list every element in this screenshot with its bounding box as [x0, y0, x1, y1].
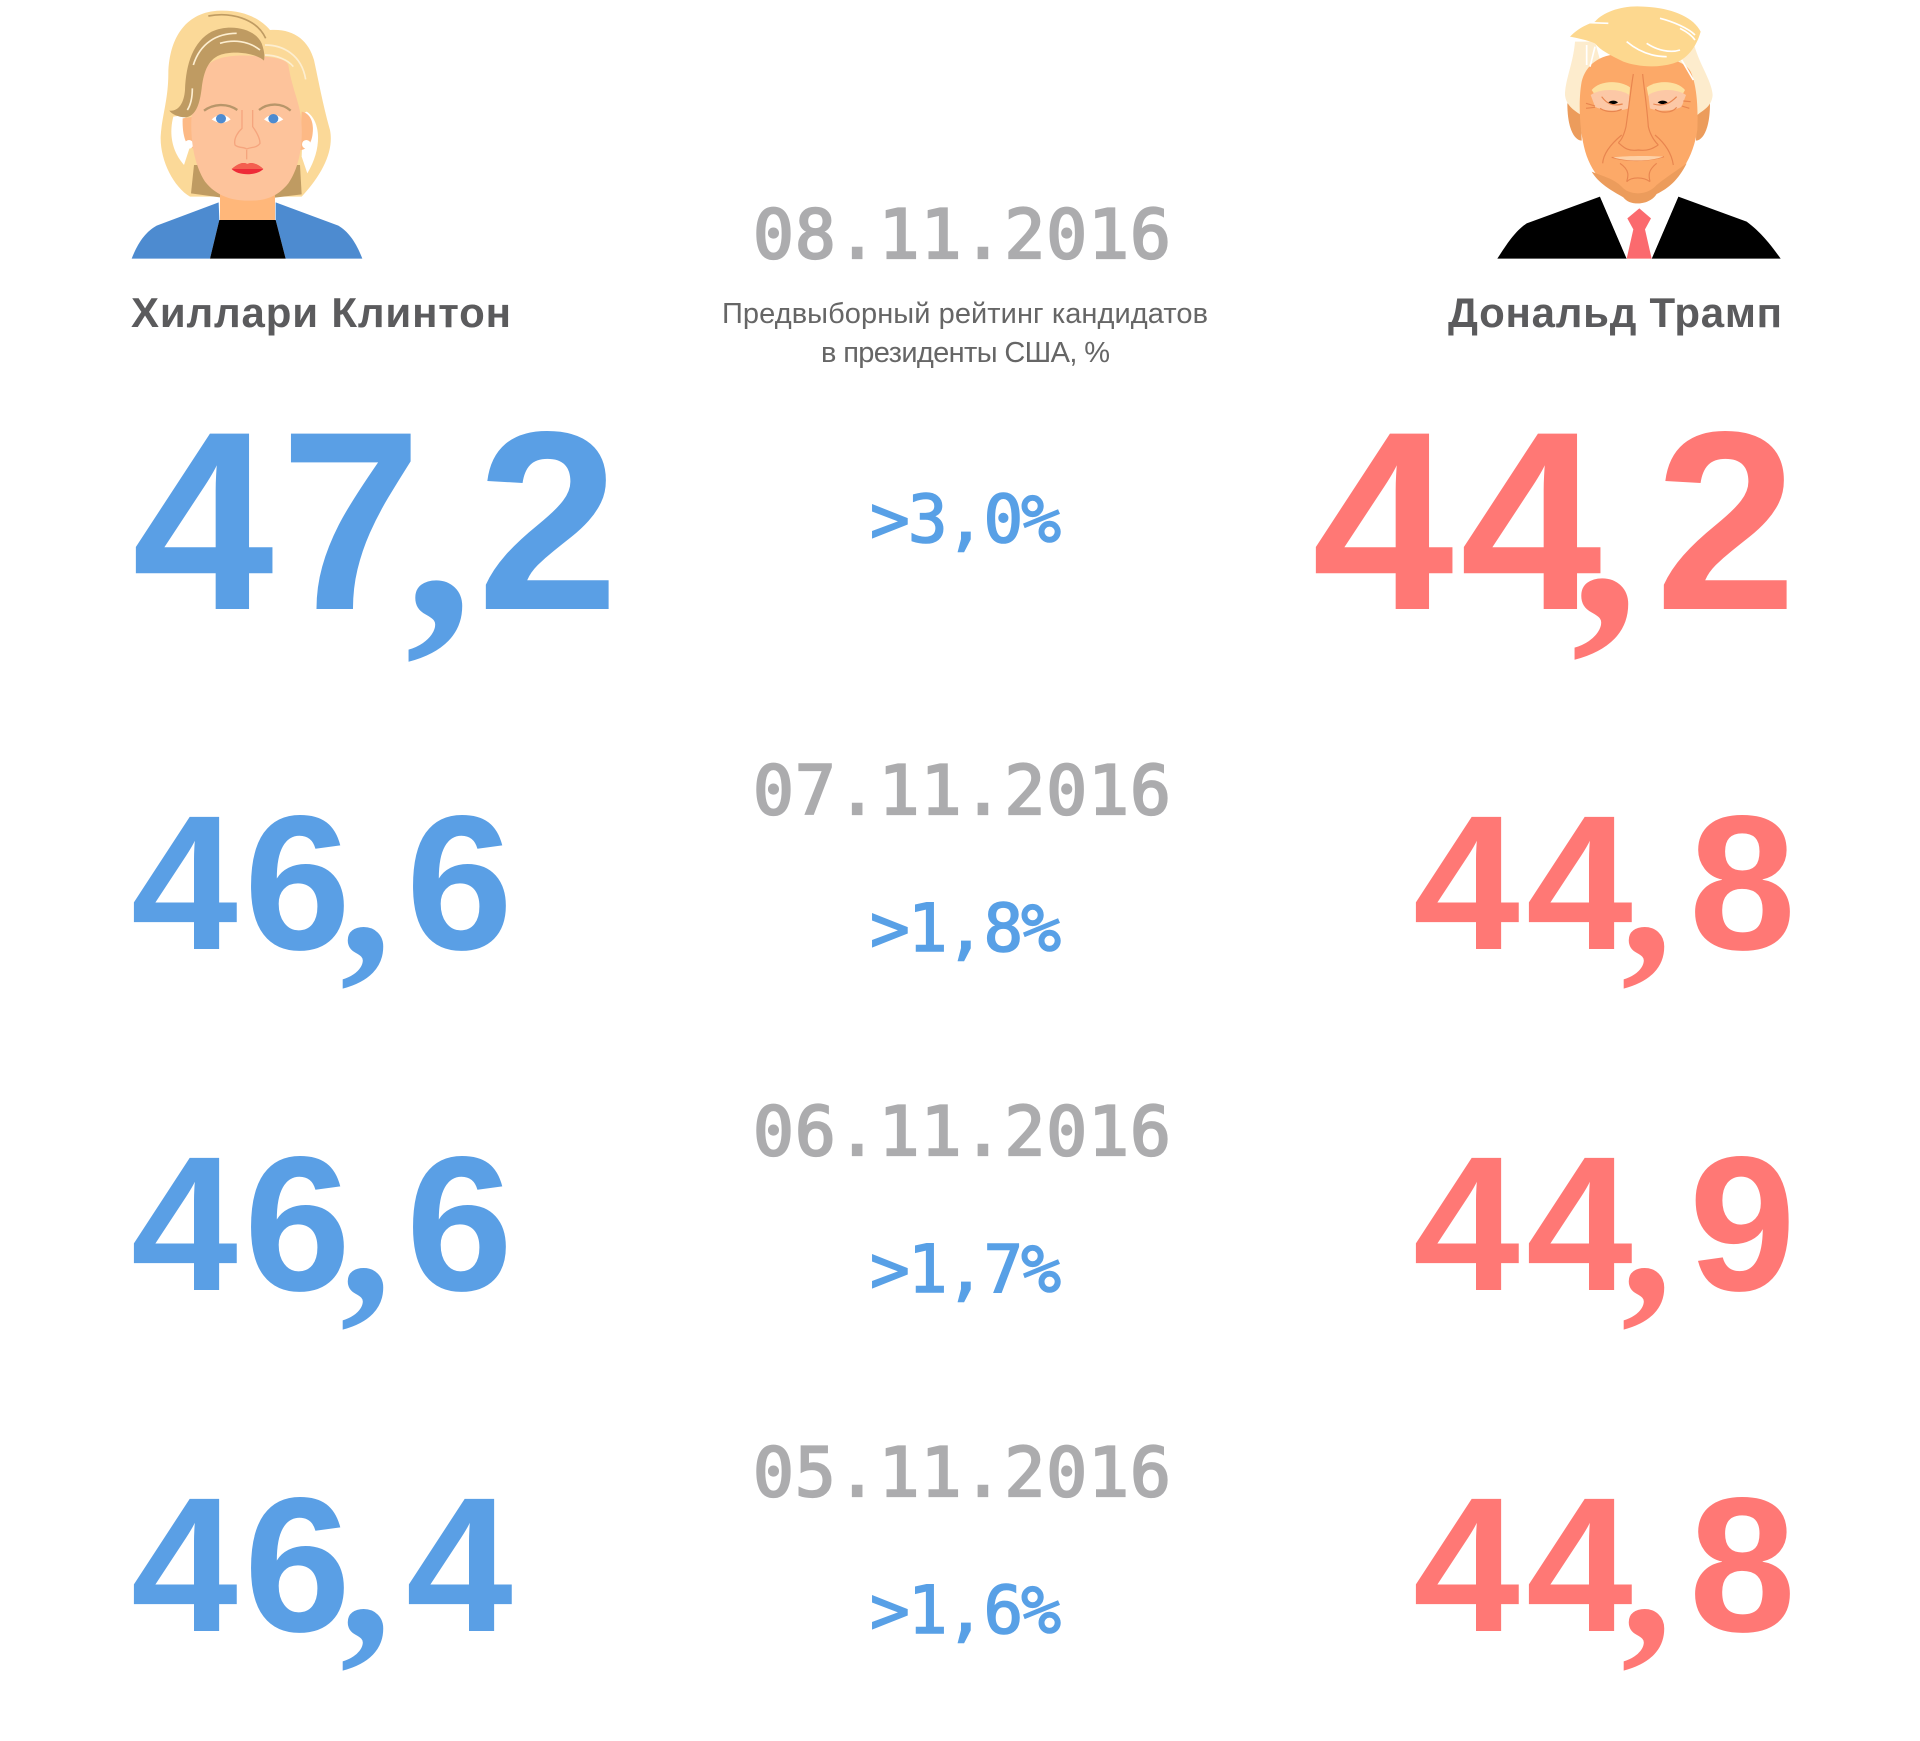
icon: Hillary Clinton portrait — [132, 11, 362, 259]
value: Clinton 46,4: 4 — [406, 1457, 513, 1672]
date: 08.11.2016: 08.11.2016 — [753, 196, 1171, 275]
value: Trump 44,8 second: 8 — [1689, 1457, 1796, 1672]
value: Clinton 46,6 second: 6 — [244, 1116, 351, 1331]
value: Clinton 47,2: 7 — [280, 379, 422, 664]
value: Clinton 46,6: 4 — [131, 775, 238, 990]
caption: в президенты США, % — [821, 337, 1110, 369]
value: Trump 44,9: 4 — [1413, 1116, 1520, 1331]
value: Clinton 46,4: , — [340, 1458, 391, 1684]
value: Clinton 46,6: 6 — [406, 775, 513, 990]
lead: >1,7%: >1,7% — [870, 1231, 1061, 1308]
value: Clinton 46,4: 6 — [244, 1457, 351, 1672]
value: Clinton 47,2: 2 — [477, 379, 619, 664]
value: Trump 44,2: 2 — [1655, 379, 1797, 664]
icon: Donald Trump portrait — [1497, 6, 1781, 259]
value: Trump 44,8 second: , — [1621, 1458, 1672, 1684]
name: Hillary Clinton: Хиллари Клинтон — [131, 289, 511, 336]
name: Donald Trump: Дональд Трамп — [1448, 289, 1782, 336]
value: Trump 44,9: , — [1621, 1117, 1672, 1343]
value: Trump 44,9: 9 — [1689, 1116, 1796, 1331]
value: Clinton 46,6: , — [340, 776, 391, 1002]
value: Trump 44,8 second: 4 — [1413, 1457, 1520, 1672]
date: 06.11.2016: 06.11.2016 — [753, 1093, 1171, 1172]
value: Trump 44,9: 4 — [1526, 1116, 1633, 1331]
value: Clinton 46,6: 6 — [244, 775, 351, 990]
caption: Предвыборный рейтинг кандидатов — [722, 298, 1208, 330]
lead: >3,0%: >3,0% — [870, 481, 1061, 558]
value: Clinton 46,6 second: 4 — [131, 1116, 238, 1331]
date: 05.11.2016: 05.11.2016 — [753, 1434, 1171, 1513]
value: Trump 44,2: , — [1571, 378, 1638, 677]
value: Trump 44,8: 8 — [1689, 775, 1796, 990]
value: Trump 44,8: , — [1621, 776, 1672, 1002]
lead: >1,6%: >1,6% — [870, 1572, 1061, 1649]
value: Clinton 46,6 second: 6 — [406, 1116, 513, 1331]
value: Trump 44,8 second: 4 — [1526, 1457, 1633, 1672]
value: Clinton 47,2: , — [405, 380, 472, 679]
date: 07.11.2016: 07.11.2016 — [753, 752, 1171, 831]
value: Trump 44,8: 4 — [1413, 775, 1520, 990]
value: Trump 44,8: 4 — [1526, 775, 1633, 990]
caption — [722, 298, 1208, 369]
value: Clinton 47,2: 4 — [132, 379, 274, 664]
value: Clinton 46,6 second: , — [340, 1117, 391, 1343]
value: Trump 44,2: 4 — [1312, 379, 1454, 664]
value: Clinton 46,4: 4 — [131, 1457, 238, 1672]
lead: >1,8%: >1,8% — [870, 890, 1061, 967]
value: Trump 44,2: 4 — [1460, 379, 1602, 664]
